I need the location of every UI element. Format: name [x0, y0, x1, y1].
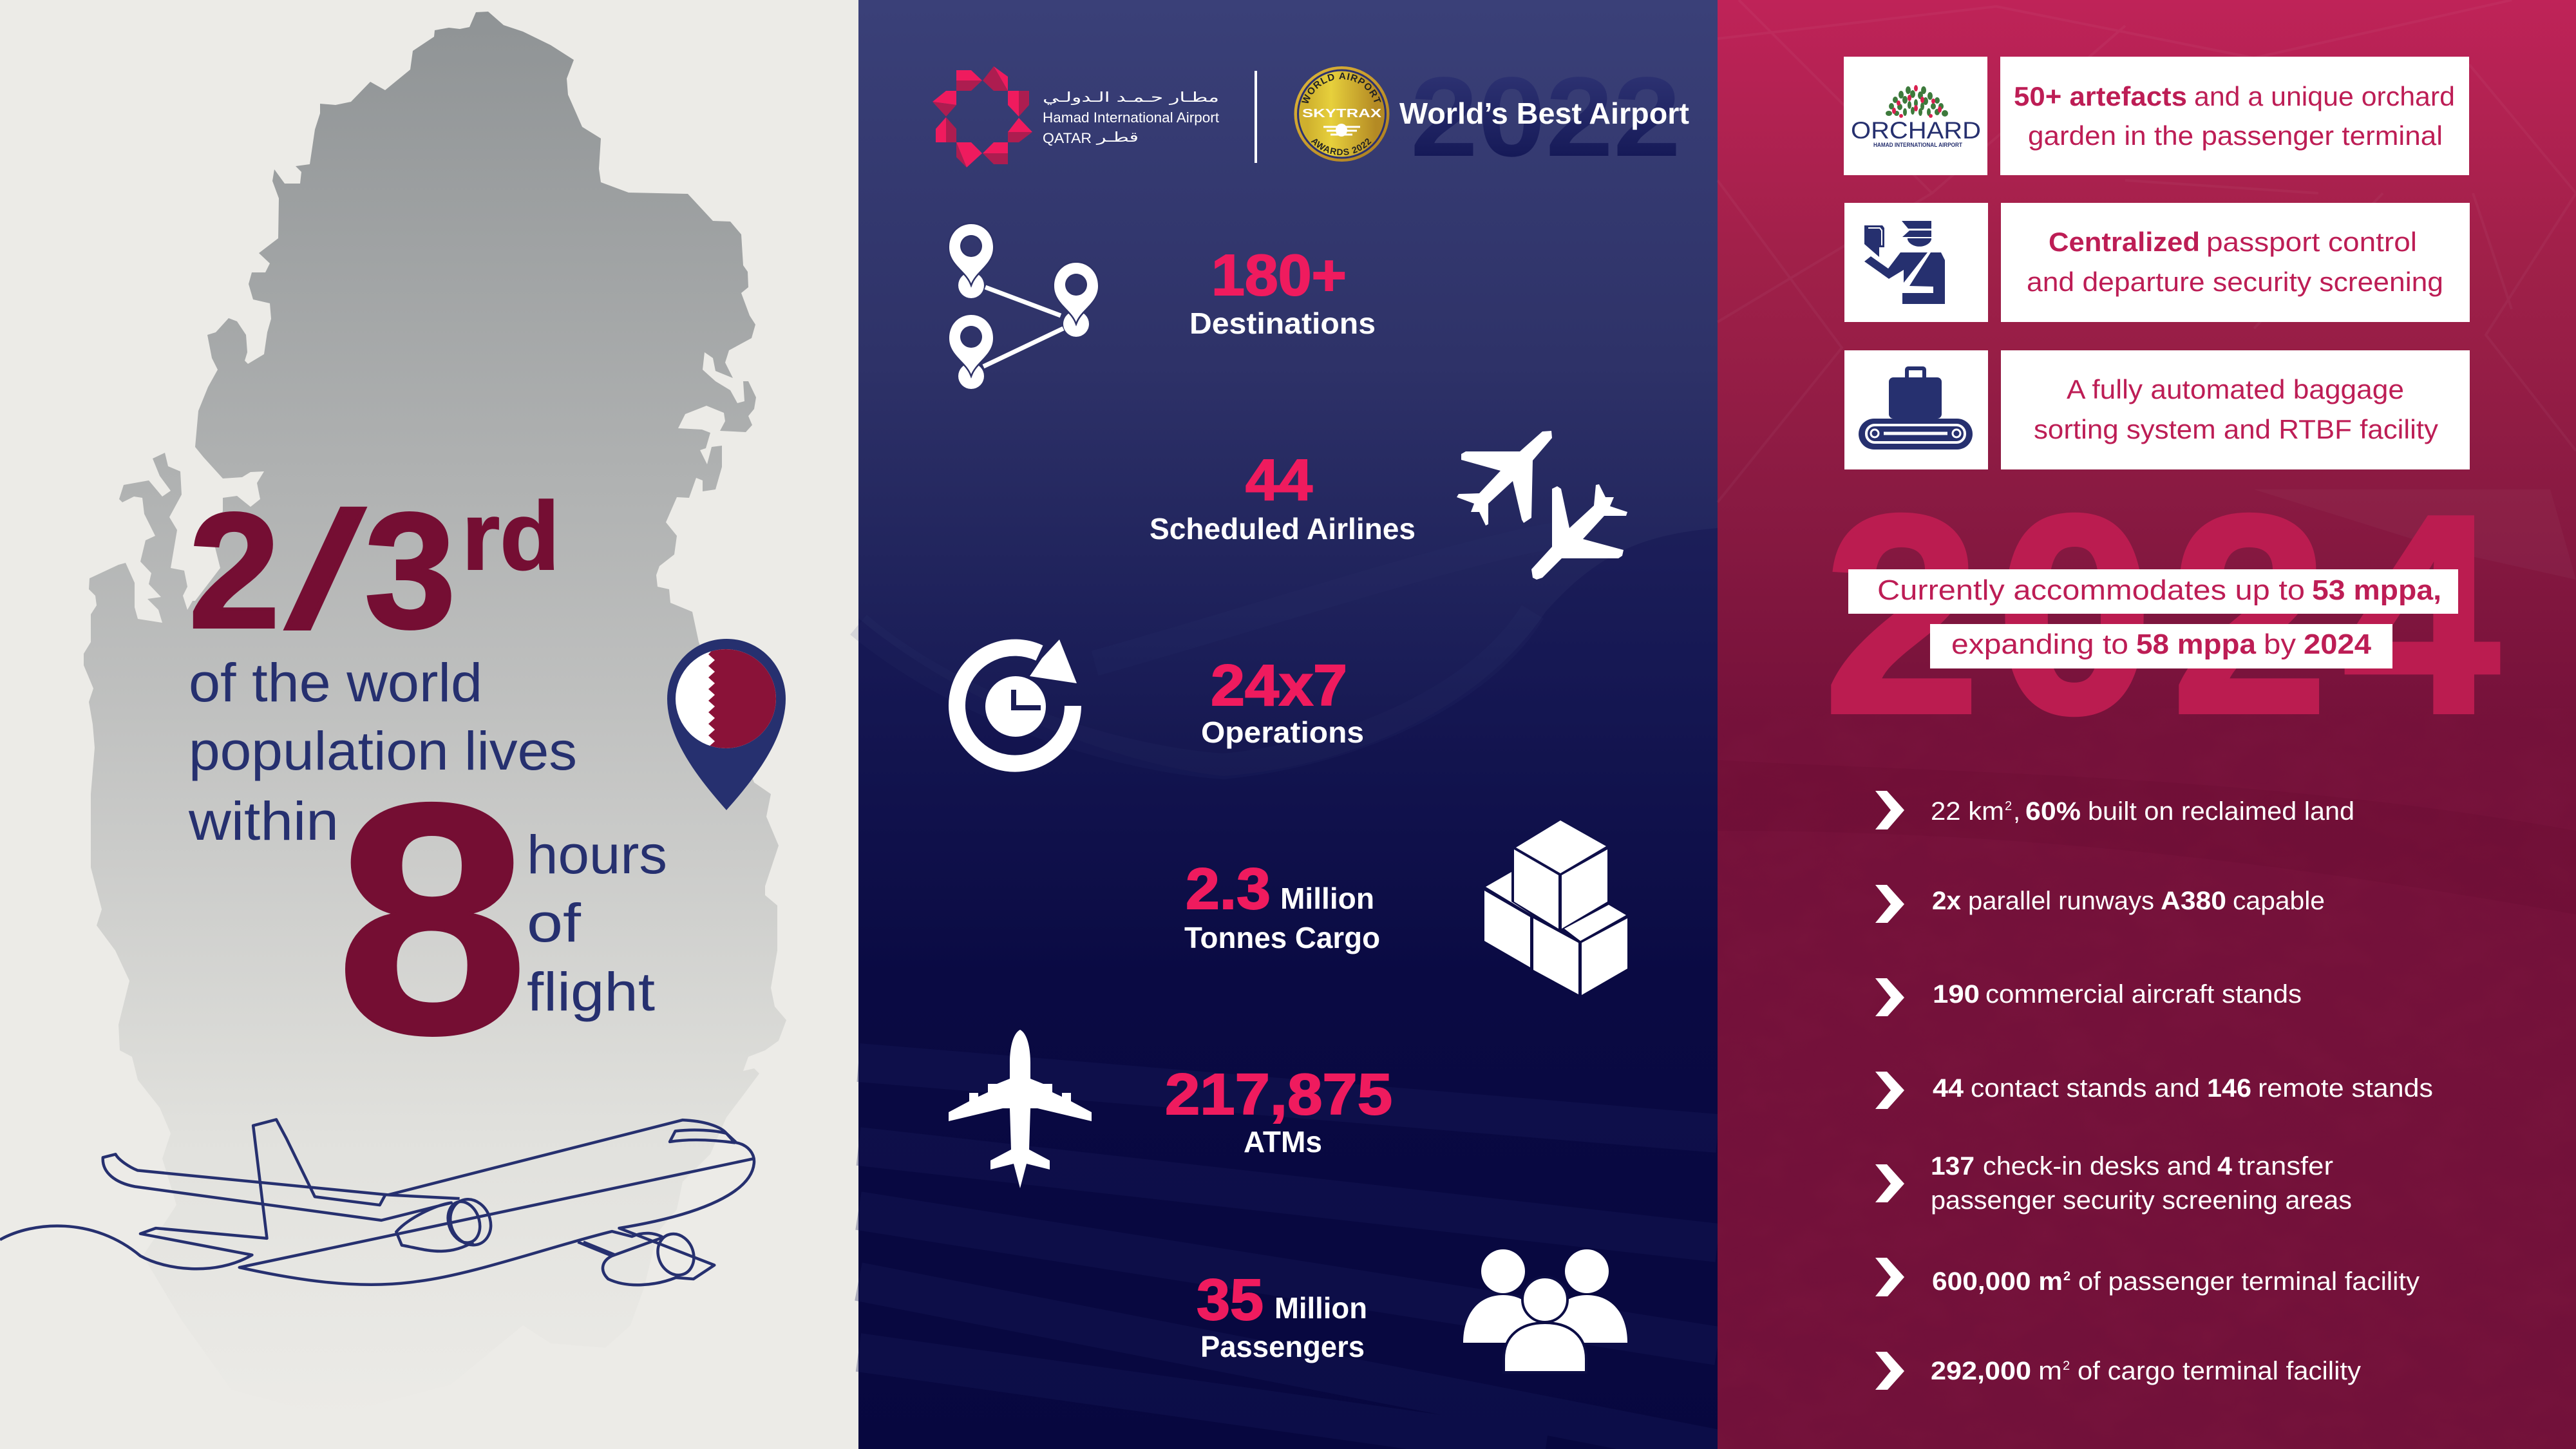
- badge: Skytrax World Airport Awards 2022: SKYTRAX: [1302, 107, 1381, 120]
- list item: check-in desks: passenger security screening areas: [1931, 1186, 2352, 1215]
- card icon: Orchard logo: [1844, 57, 1987, 175]
- list item: aircraft stands: commercial aircraft stands: [1985, 980, 2302, 1009]
- headline: 2/3rd: 3: [365, 479, 456, 663]
- card icon: Orchard logo: ORCHARD: [1851, 117, 1981, 144]
- list item: contact and remote stands: 44: [1933, 1074, 1964, 1103]
- card: orchard text: and a unique orchard: [2194, 81, 2455, 111]
- badge: Skytrax World Airport Awards 2022: [1294, 66, 1390, 162]
- background year 2024: 2024: [1823, 457, 2501, 773]
- stat: 217,875 ATMs: [1165, 1063, 1392, 1159]
- list item: land area: 60%: [2025, 797, 2081, 826]
- list item: land area: built on reclaimed land: [2088, 797, 2354, 826]
- list item: runways: [1875, 885, 2325, 923]
- headline: 2/3rd: rd: [462, 482, 560, 590]
- stat: 44 scheduled airlines: [1150, 448, 1416, 545]
- illustration: line-art airplane: [0, 1119, 754, 1285]
- card icon: Orchard logo: HAMAD INTERNATIONAL AIRPORT: [1873, 142, 1962, 148]
- list item: passenger terminal: 2: [2063, 1269, 2070, 1283]
- panel: left population reach: [0, 12, 786, 1287]
- text: of the world population lives within: [188, 652, 577, 851]
- card: passport control text: [2001, 203, 2470, 322]
- headline: 2/3rd: /: [287, 479, 364, 663]
- capacity callout: 58 mppa: [2136, 629, 2257, 660]
- list item: check-in desks: 4: [2217, 1152, 2233, 1180]
- list item: runways: parallel runways: [1968, 887, 2154, 915]
- card: passport control text: and departure security screening: [2027, 267, 2443, 297]
- stat: 2.3 million tonnes cargo: [1184, 857, 1380, 954]
- list item: contact and remote stands: contact stands and: [1971, 1074, 2200, 1103]
- stat: 44 scheduled airlines: 44: [1245, 448, 1312, 513]
- stat: 44 scheduled airlines: Scheduled Airlines: [1150, 512, 1416, 545]
- capacity callout: by: [2264, 629, 2296, 660]
- card: orchard text: 50+ artefacts: [2014, 81, 2187, 111]
- icon: location pin with Qatar flag: [667, 639, 786, 810]
- icon: airplane top view: [949, 1030, 1092, 1188]
- card: baggage text: [2001, 350, 2470, 469]
- text: hours of flight: flight: [527, 961, 655, 1022]
- text: hours of flight: of: [527, 893, 582, 953]
- icon: clock with circular arrow: [957, 639, 1077, 764]
- stat: 35 million passengers: Million: [1274, 1291, 1367, 1325]
- stat: 217,875 ATMs: 217,875: [1165, 1063, 1392, 1127]
- list item: runways: capable: [2233, 887, 2325, 915]
- stat: 217,875 ATMs: ATMs: [1244, 1125, 1322, 1159]
- list item: check-in desks: transfer: [2238, 1152, 2333, 1180]
- icon: connected map pins: [949, 224, 1098, 389]
- capacity callout: 2024: [2304, 629, 2372, 660]
- badge: Skytrax World Airport Awards 2022: AWARDS 2022: [1311, 138, 1372, 155]
- logo: Hamad International Airport: قطـر: [1096, 129, 1139, 145]
- list item: aircraft stands: [1875, 978, 2302, 1016]
- capacity callout: [1848, 569, 2458, 668]
- list item: passenger terminal: 600,000 m: [1932, 1267, 2063, 1296]
- stat: 35 million passengers: 35: [1197, 1268, 1264, 1332]
- logo: Hamad International Airport: QATAR: [1043, 130, 1092, 146]
- list item: check-in desks: [1875, 1152, 2352, 1215]
- list item: check-in desks: check-in desks and: [1983, 1152, 2211, 1180]
- text: of the world population lives within: within: [188, 791, 339, 851]
- panel: right facilities: [1718, 0, 2576, 1449]
- list item: land area: [1875, 791, 2354, 829]
- list item: aircraft stands: 190: [1933, 980, 1980, 1009]
- card icon: baggage conveyor: [1844, 350, 1988, 469]
- panel: centre airport statistics: [850, 0, 1718, 1449]
- headline: 2/3rd: [189, 479, 560, 663]
- big number 8: 8: [336, 735, 529, 1103]
- stat: 24x7 operations: 24x7: [1211, 654, 1347, 718]
- capacity callout: expanding to: [1951, 629, 2128, 660]
- text: hours of flight: hours: [527, 824, 667, 885]
- stat: 24x7 operations: [1201, 654, 1364, 749]
- list item: check-in desks: 137: [1931, 1152, 1975, 1180]
- card: passport control text: Centralized: [2049, 227, 2200, 257]
- icon: two airplanes: [1457, 431, 1627, 580]
- stat: 180+ destinations: Destinations: [1189, 307, 1376, 340]
- stat: 2.3 million tonnes cargo: 2.3: [1186, 857, 1271, 922]
- list item: passenger terminal: of passenger terminal facility: [2078, 1267, 2420, 1296]
- stat: 35 million passengers: [1197, 1268, 1367, 1363]
- list item: runways: A380: [2161, 887, 2226, 915]
- list item: contact and remote stands: 146: [2207, 1074, 2251, 1103]
- logo: Hamad International Airport: [933, 66, 1219, 167]
- list item: runways: 2x: [1932, 887, 1961, 915]
- badge: Skytrax World Airport Awards 2022: WORLD AIRPORT: [1302, 72, 1381, 103]
- stat: 2.3 million tonnes cargo: Million: [1280, 882, 1374, 915]
- card: baggage text: sorting system and RTBF facility: [2034, 414, 2438, 444]
- stat: 35 million passengers: Passengers: [1200, 1330, 1365, 1363]
- list item: passenger terminal: [1875, 1258, 2420, 1296]
- list item: cargo terminal: 292,000: [1931, 1357, 2031, 1385]
- list item: contact and remote stands: remote stands: [2258, 1074, 2433, 1103]
- icon: group of people: [1463, 1249, 1627, 1372]
- map of Qatar: [84, 12, 786, 1417]
- list item: cargo terminal: of cargo terminal facility: [2078, 1357, 2361, 1385]
- stat: 2.3 million tonnes cargo: Tonnes Cargo: [1184, 921, 1380, 954]
- card: passport control text: passport control: [2206, 227, 2417, 257]
- headline: 2/3rd: 2: [189, 479, 280, 663]
- list item: contact and remote stands: [1875, 1072, 2433, 1109]
- stat: 24x7 operations: Operations: [1201, 715, 1364, 749]
- card: orchard text: garden in the passenger terminal: [2028, 120, 2443, 151]
- list item: land area: ,: [2013, 797, 2020, 826]
- heading: World's Best Airport: World’s Best Airport: [1399, 97, 1689, 130]
- logo: Hamad International Airport: مطـار حـمـد الـدولـي: [1043, 90, 1219, 105]
- icon: stacked cargo boxes: [1484, 820, 1627, 995]
- capacity callout: Currently accommodates up to: [1877, 574, 2305, 606]
- text: hours of flight: [527, 824, 667, 1022]
- logo: Hamad International Airport: Hamad International Airport: [1043, 109, 1219, 126]
- list item: cargo terminal: 2: [2063, 1359, 2070, 1373]
- list item: land area: 22 km: [1931, 797, 2004, 826]
- stat: 180+ destinations: [1189, 243, 1376, 340]
- capacity callout: 53 mppa,: [2312, 574, 2441, 606]
- list item: cargo terminal: m: [2038, 1357, 2062, 1385]
- list item: land area: 2: [2005, 799, 2012, 813]
- background year 2022: 2022: [1410, 54, 1681, 180]
- card: orchard text: [2000, 57, 2469, 175]
- text: of the world population lives within: population lives: [189, 721, 577, 781]
- list item: cargo terminal: [1875, 1352, 2361, 1390]
- card icon: passport officer: [1844, 203, 1988, 322]
- text: of the world population lives within: of the world: [189, 652, 482, 713]
- card: baggage text: A fully automated baggage: [2067, 374, 2404, 404]
- stat: 180+ destinations: 180+: [1211, 243, 1347, 308]
